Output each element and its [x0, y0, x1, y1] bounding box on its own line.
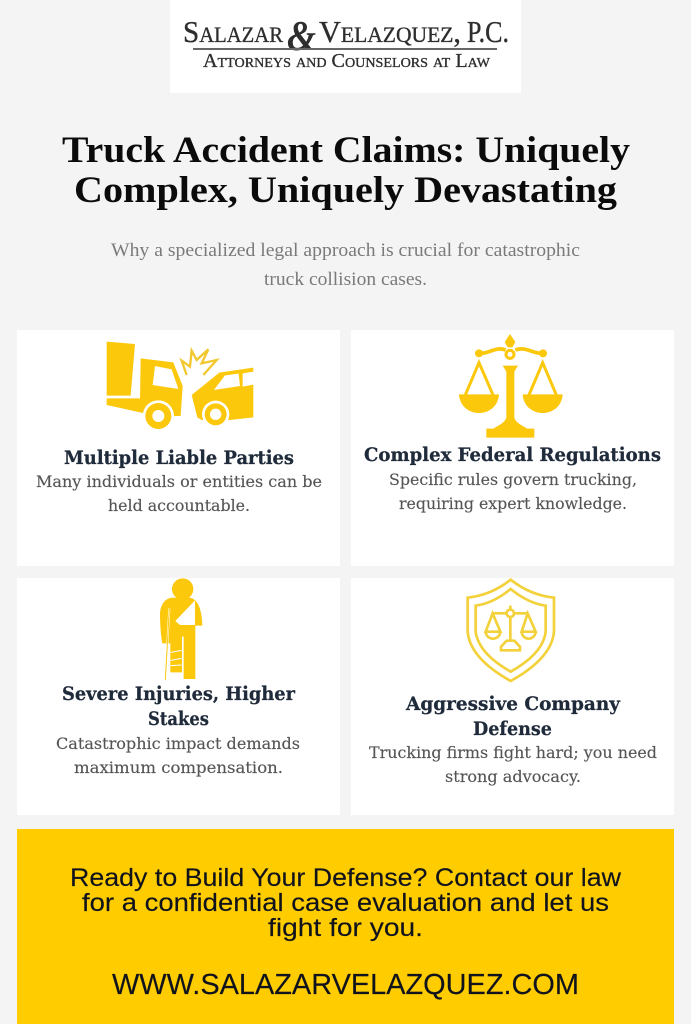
call to action text: fight for you. — [268, 914, 423, 942]
panel: call to action — [17, 829, 674, 1024]
website url: WWW.SALAZARVELAZQUEZ.COM — [112, 969, 579, 1001]
body text — [56, 734, 300, 777]
subtitle: Why a specialized legal approach is crucial for catastrophic — [111, 240, 580, 261]
body text: Catastrophic impact demands — [56, 734, 300, 753]
body text: strong advocacy. — [445, 767, 581, 786]
icon: injured person with crutch — [160, 578, 202, 680]
heading: Aggressive Company — [405, 693, 621, 715]
body text: Specific rules govern trucking, — [389, 470, 637, 489]
logo: Salazar — [183, 14, 283, 49]
logo — [170, 0, 521, 93]
body text — [389, 470, 637, 513]
heading: Multiple Liable Parties — [64, 447, 294, 469]
subtitle — [111, 240, 580, 290]
logo: P.C. — [467, 14, 509, 49]
heading: Complex Federal Regulations — [364, 444, 661, 466]
call to action text — [70, 864, 622, 942]
icon: shield with scales — [468, 580, 554, 681]
call to action text: for a confidential case evaluation and let us — [82, 889, 609, 917]
body text: Many individuals or entities can be — [36, 472, 322, 491]
panel: severe injuries — [17, 578, 340, 815]
heading: Defense — [473, 718, 552, 740]
body text — [36, 472, 322, 515]
subtitle: truck collision cases. — [264, 269, 427, 290]
panel: multiple liable parties — [17, 330, 340, 566]
body text — [369, 743, 657, 786]
title: Complex, Uniquely Devastating — [74, 170, 618, 211]
body text: requiring expert knowledge. — [399, 494, 627, 513]
logo: Attorneys and Counselors at Law — [203, 50, 491, 72]
logo: & — [287, 14, 316, 60]
call to action text: Ready to Build Your Defense? Contact our law — [70, 864, 622, 892]
icon: scales of justice — [459, 334, 563, 438]
icon: truck colliding with car — [107, 342, 253, 432]
heading: Severe Injuries, Higher — [62, 683, 296, 705]
body text: Trucking firms fight hard; you need — [369, 743, 657, 762]
heading — [405, 693, 621, 740]
heading: Stakes — [148, 708, 209, 730]
panel: complex federal regulations — [351, 330, 674, 566]
body text: held accountable. — [108, 496, 250, 515]
logo: Velazquez, — [319, 14, 461, 49]
title — [62, 130, 631, 211]
body text: maximum compensation. — [74, 758, 283, 777]
panel: aggressive company defense — [351, 578, 674, 815]
heading — [62, 683, 296, 730]
title: Truck Accident Claims: Uniquely — [62, 130, 631, 171]
